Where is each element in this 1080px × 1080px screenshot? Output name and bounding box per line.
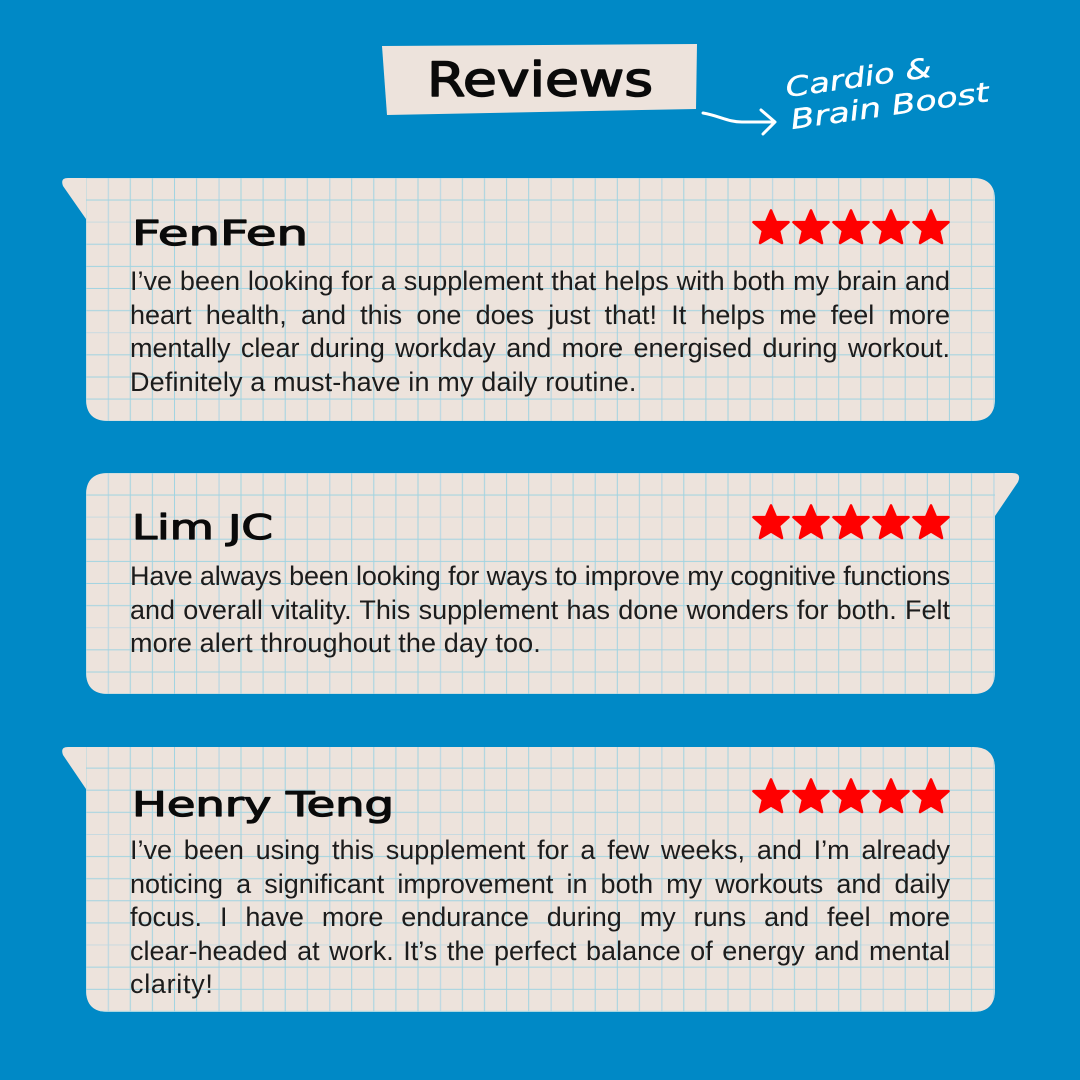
review text: Definitely a must-have in my daily routine. <box>130 366 637 396</box>
reviewer name: Henry Teng <box>132 785 394 825</box>
panel: review FenFen <box>62 178 995 421</box>
star rating <box>754 780 948 812</box>
star rating <box>754 210 948 243</box>
reviewer name: FenFen <box>132 214 308 254</box>
review text <box>130 834 960 1004</box>
review text: Have always been looking for ways to improve my cognitive functions <box>130 561 950 591</box>
arrow <box>703 110 775 134</box>
review text: I’ve been using this supplement for a few weeks, and I’m already <box>130 835 950 865</box>
speech bubble card <box>62 747 995 1012</box>
reviewer name: Lim JC <box>132 508 273 548</box>
review text: more alert throughout the day too. <box>130 628 541 658</box>
review text: focus. I have more endurance during my runs and feel more <box>130 902 950 932</box>
speech bubble card <box>86 473 1019 694</box>
review text: clear-headed at work. It’s the perfect balance of energy and mental <box>130 936 950 966</box>
speech bubble card <box>62 178 995 421</box>
review text <box>130 560 960 670</box>
star rating <box>754 506 948 538</box>
title text: Reviews <box>427 53 653 108</box>
handwritten note: Cardio & Brain Boost <box>784 53 993 136</box>
review text: heart health, and this one does just that! It helps me feel more <box>130 300 950 330</box>
review text: and overall vitality. This supplement has done wonders for both. Felt <box>130 594 950 624</box>
review text: mentally clear during workday and more energised during workout. <box>130 333 950 363</box>
title banner <box>382 44 697 115</box>
review text <box>130 265 960 405</box>
handwritten note: Cardio & Brain Boost: Cardio & <box>784 53 934 104</box>
panel: review Lim JC <box>86 473 1019 694</box>
panel: review Henry Teng <box>62 747 995 1012</box>
handwritten note: Cardio & Brain Boost: Brain Boost <box>789 77 993 136</box>
review text: noticing a significant improvement in both my workouts and daily <box>130 868 950 898</box>
review text: clarity! <box>130 969 214 999</box>
review text: I’ve been looking for a supplement that helps with both my brain and <box>130 266 950 296</box>
